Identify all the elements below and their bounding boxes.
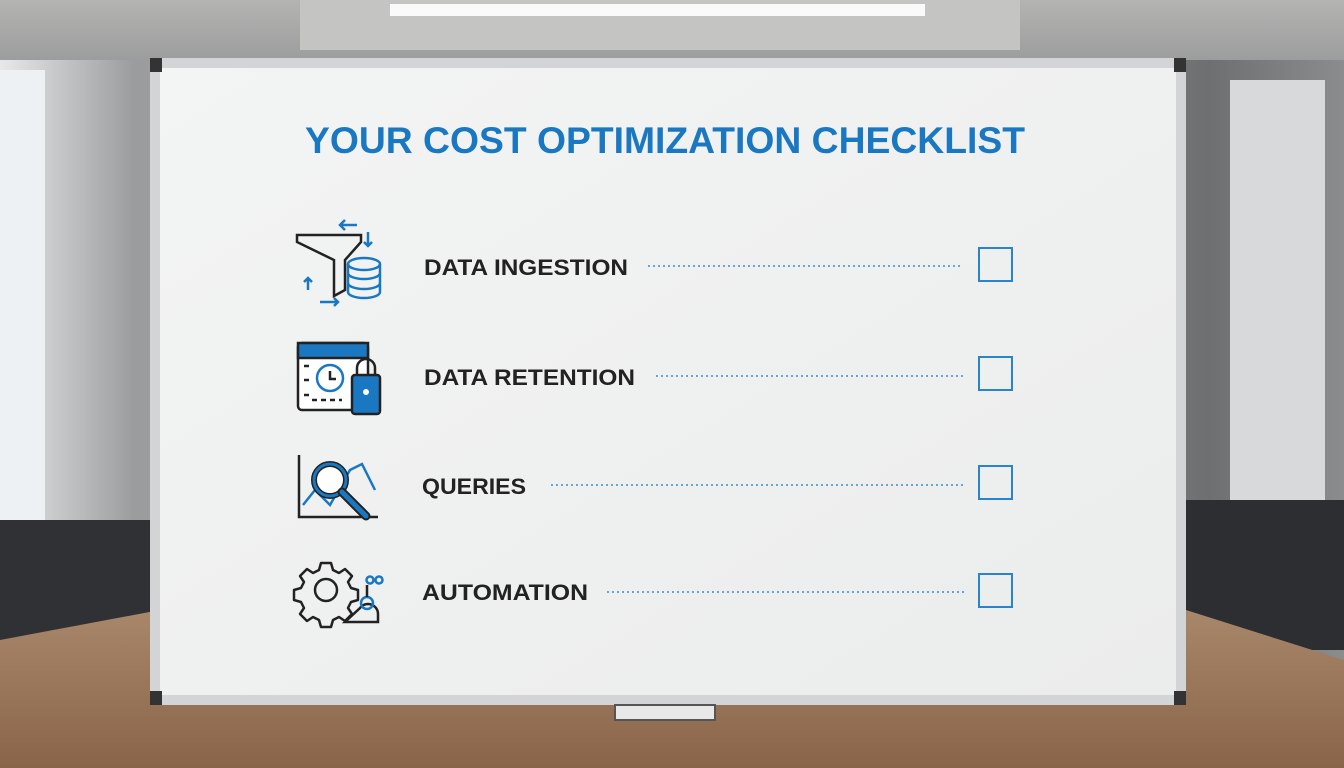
label: DATA INGESTION xyxy=(424,255,628,280)
row: automation xyxy=(294,563,1012,627)
whiteboard xyxy=(150,58,1186,720)
row: queries xyxy=(299,455,1012,517)
title: YOUR COST OPTIMIZATION CHECKLIST xyxy=(305,120,1025,161)
checkbox xyxy=(979,466,1012,499)
label: AUTOMATION xyxy=(422,580,588,605)
icon: funnel and database xyxy=(297,220,380,306)
checkbox xyxy=(979,357,1012,390)
icon: gear and robot arm xyxy=(294,563,382,627)
icon: calendar with clock and lock xyxy=(298,343,380,414)
row: data retention xyxy=(298,343,1012,414)
label: DATA RETENTION xyxy=(424,365,635,390)
label: QUERIES xyxy=(422,474,526,499)
checkbox xyxy=(979,248,1012,281)
checkbox xyxy=(979,574,1012,607)
icon: chart with magnifier xyxy=(299,455,378,517)
row: data ingestion xyxy=(297,220,1012,306)
